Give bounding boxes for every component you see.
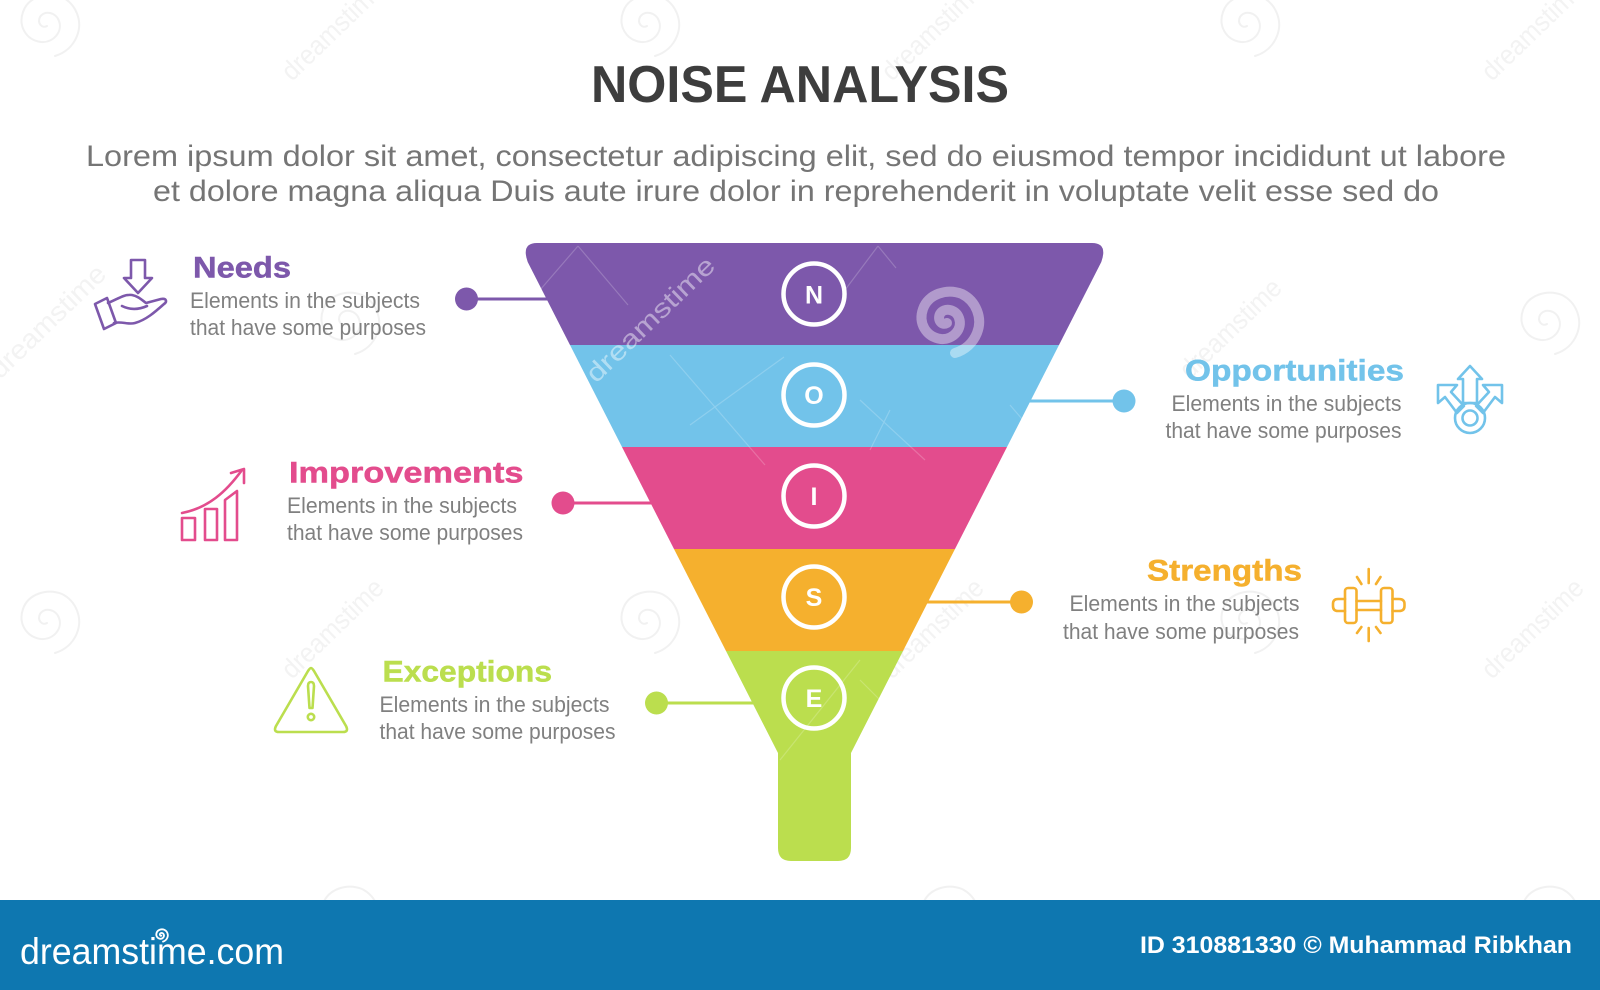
text: needs description: that have some purposes xyxy=(190,315,426,340)
connector: opportunities xyxy=(1025,390,1136,412)
letter badge: I: I xyxy=(811,483,817,511)
text: opportunities description: Elements in the subjects xyxy=(1172,391,1402,416)
funnel band: E and spout xyxy=(726,651,903,861)
text: needs description: Elements in the subjects xyxy=(190,288,420,313)
letter badge: I xyxy=(784,466,844,526)
heading: improvements: Improvements xyxy=(289,456,524,490)
text: improvements description: Elements in the subjects xyxy=(287,493,517,518)
subtitle text block: et dolore magna aliqua Duis aute irure dolor in reprehenderit in voluptate velit esse sed do xyxy=(153,175,1439,208)
watermark: dreamstime on funnel: dreamstime xyxy=(579,250,721,388)
connector: exceptions xyxy=(645,692,756,714)
text: improvements description xyxy=(287,493,523,545)
heading: exceptions: Exceptions xyxy=(382,656,552,688)
text: strengths description: that have some purposes xyxy=(1063,619,1299,644)
icon: warning triangle xyxy=(275,668,347,732)
subtitle text block xyxy=(86,140,1506,208)
letter badge: E: E xyxy=(806,685,822,713)
footer logo swirl xyxy=(156,929,168,942)
footer bar xyxy=(0,900,1600,990)
connector: improvements xyxy=(552,492,655,514)
letter badge: E xyxy=(784,668,844,728)
letter badge: O: O xyxy=(804,382,824,410)
footer credit: ID 310881330 © Muhammad Ribkhan xyxy=(1140,932,1572,959)
letter badge: O xyxy=(784,364,844,426)
text: exceptions description xyxy=(380,692,616,744)
panel: exceptions xyxy=(275,656,616,744)
heading: needs: Needs xyxy=(193,252,291,284)
panel: improvements xyxy=(182,456,524,545)
text: improvements description: that have some purposes xyxy=(287,520,523,545)
funnel band: N xyxy=(526,243,1103,345)
text: strengths description xyxy=(1063,591,1300,644)
icon: dumbbell xyxy=(1333,569,1404,641)
watermark: swirl on funnel xyxy=(922,292,979,353)
heading: strengths: Strengths xyxy=(1147,554,1302,588)
icon: diverging arrows xyxy=(1438,366,1502,433)
icon: hand receiving arrow xyxy=(95,260,166,329)
text: exceptions description: that have some purposes xyxy=(380,719,616,744)
text: dreamstime xyxy=(275,572,390,684)
icon: growth chart xyxy=(182,469,244,540)
title: NOISE ANALYSIS xyxy=(591,56,1009,114)
text: dreamstime xyxy=(875,572,990,684)
funnel band: I xyxy=(622,447,1007,549)
text: strengths description: Elements in the subjects xyxy=(1070,591,1300,616)
panel: needs xyxy=(95,252,426,340)
footer logo: dreamstime.com: dreamstime.com xyxy=(20,931,284,972)
letter badge: S: S xyxy=(806,584,822,612)
connector: needs xyxy=(455,288,552,310)
text: opportunities description: that have some purposes xyxy=(1166,418,1402,443)
heading: opportunities: Opportunities xyxy=(1185,354,1404,388)
subtitle text block: Lorem ipsum dolor sit amet, consectetur adipiscing elit, sed do eiusmod tempor incididunt ut labore xyxy=(86,140,1506,173)
panel: strengths xyxy=(1063,554,1404,644)
funnel band: S xyxy=(674,549,955,651)
text: dreamstime xyxy=(1173,272,1288,384)
text: needs description xyxy=(190,288,426,340)
text: exceptions description: Elements in the subjects xyxy=(380,692,610,717)
funnel band: O xyxy=(570,345,1059,447)
letter badge: N xyxy=(784,264,844,324)
text: opportunities description xyxy=(1166,391,1402,443)
funnel chart xyxy=(526,243,1103,861)
letter badge: N: N xyxy=(805,282,823,310)
letter badge: S xyxy=(784,566,844,628)
text: dreamstime xyxy=(1475,572,1590,684)
connector: strengths xyxy=(925,590,1033,614)
panel: opportunities xyxy=(1166,354,1502,443)
